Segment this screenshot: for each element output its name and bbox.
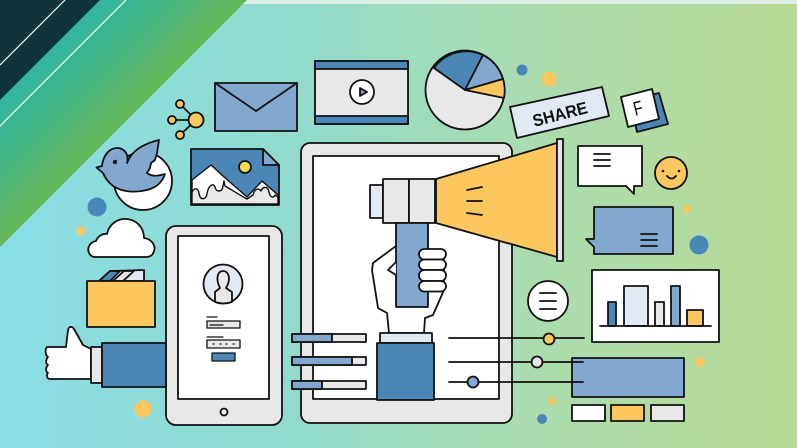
icon: picture file xyxy=(191,149,279,205)
dark triangle xyxy=(0,0,100,100)
bar chart xyxy=(592,270,719,342)
top strip xyxy=(240,0,797,4)
icon: folder xyxy=(87,270,155,327)
icon: envelope xyxy=(215,83,297,131)
pie chart xyxy=(426,50,505,130)
corner banner xyxy=(0,0,247,247)
thumbs-up arm xyxy=(46,327,166,387)
megaphone xyxy=(370,139,563,261)
blue panel with swatches xyxy=(572,358,684,421)
share label xyxy=(510,87,609,138)
slider lines xyxy=(449,334,584,388)
icon set xyxy=(46,50,719,425)
decorative dots xyxy=(76,64,708,424)
hand holding megaphone xyxy=(372,223,446,400)
icon: video player xyxy=(315,61,408,124)
progress bars xyxy=(292,334,366,389)
user avatar xyxy=(204,264,242,304)
blue speech bubble xyxy=(586,207,673,254)
green triangle xyxy=(0,0,247,247)
white speech bubble xyxy=(578,146,642,194)
menu circle xyxy=(528,281,568,321)
share label: SHARE xyxy=(531,98,590,131)
main tablet xyxy=(301,143,512,423)
icon: bird and moon xyxy=(96,140,172,210)
icon: smiley xyxy=(655,157,687,189)
icon: F card: F xyxy=(631,96,645,120)
login form xyxy=(207,317,240,361)
icon: F card xyxy=(621,89,668,132)
phone xyxy=(166,226,282,425)
icon: cloud xyxy=(88,219,155,257)
icon: share nodes xyxy=(168,100,204,139)
